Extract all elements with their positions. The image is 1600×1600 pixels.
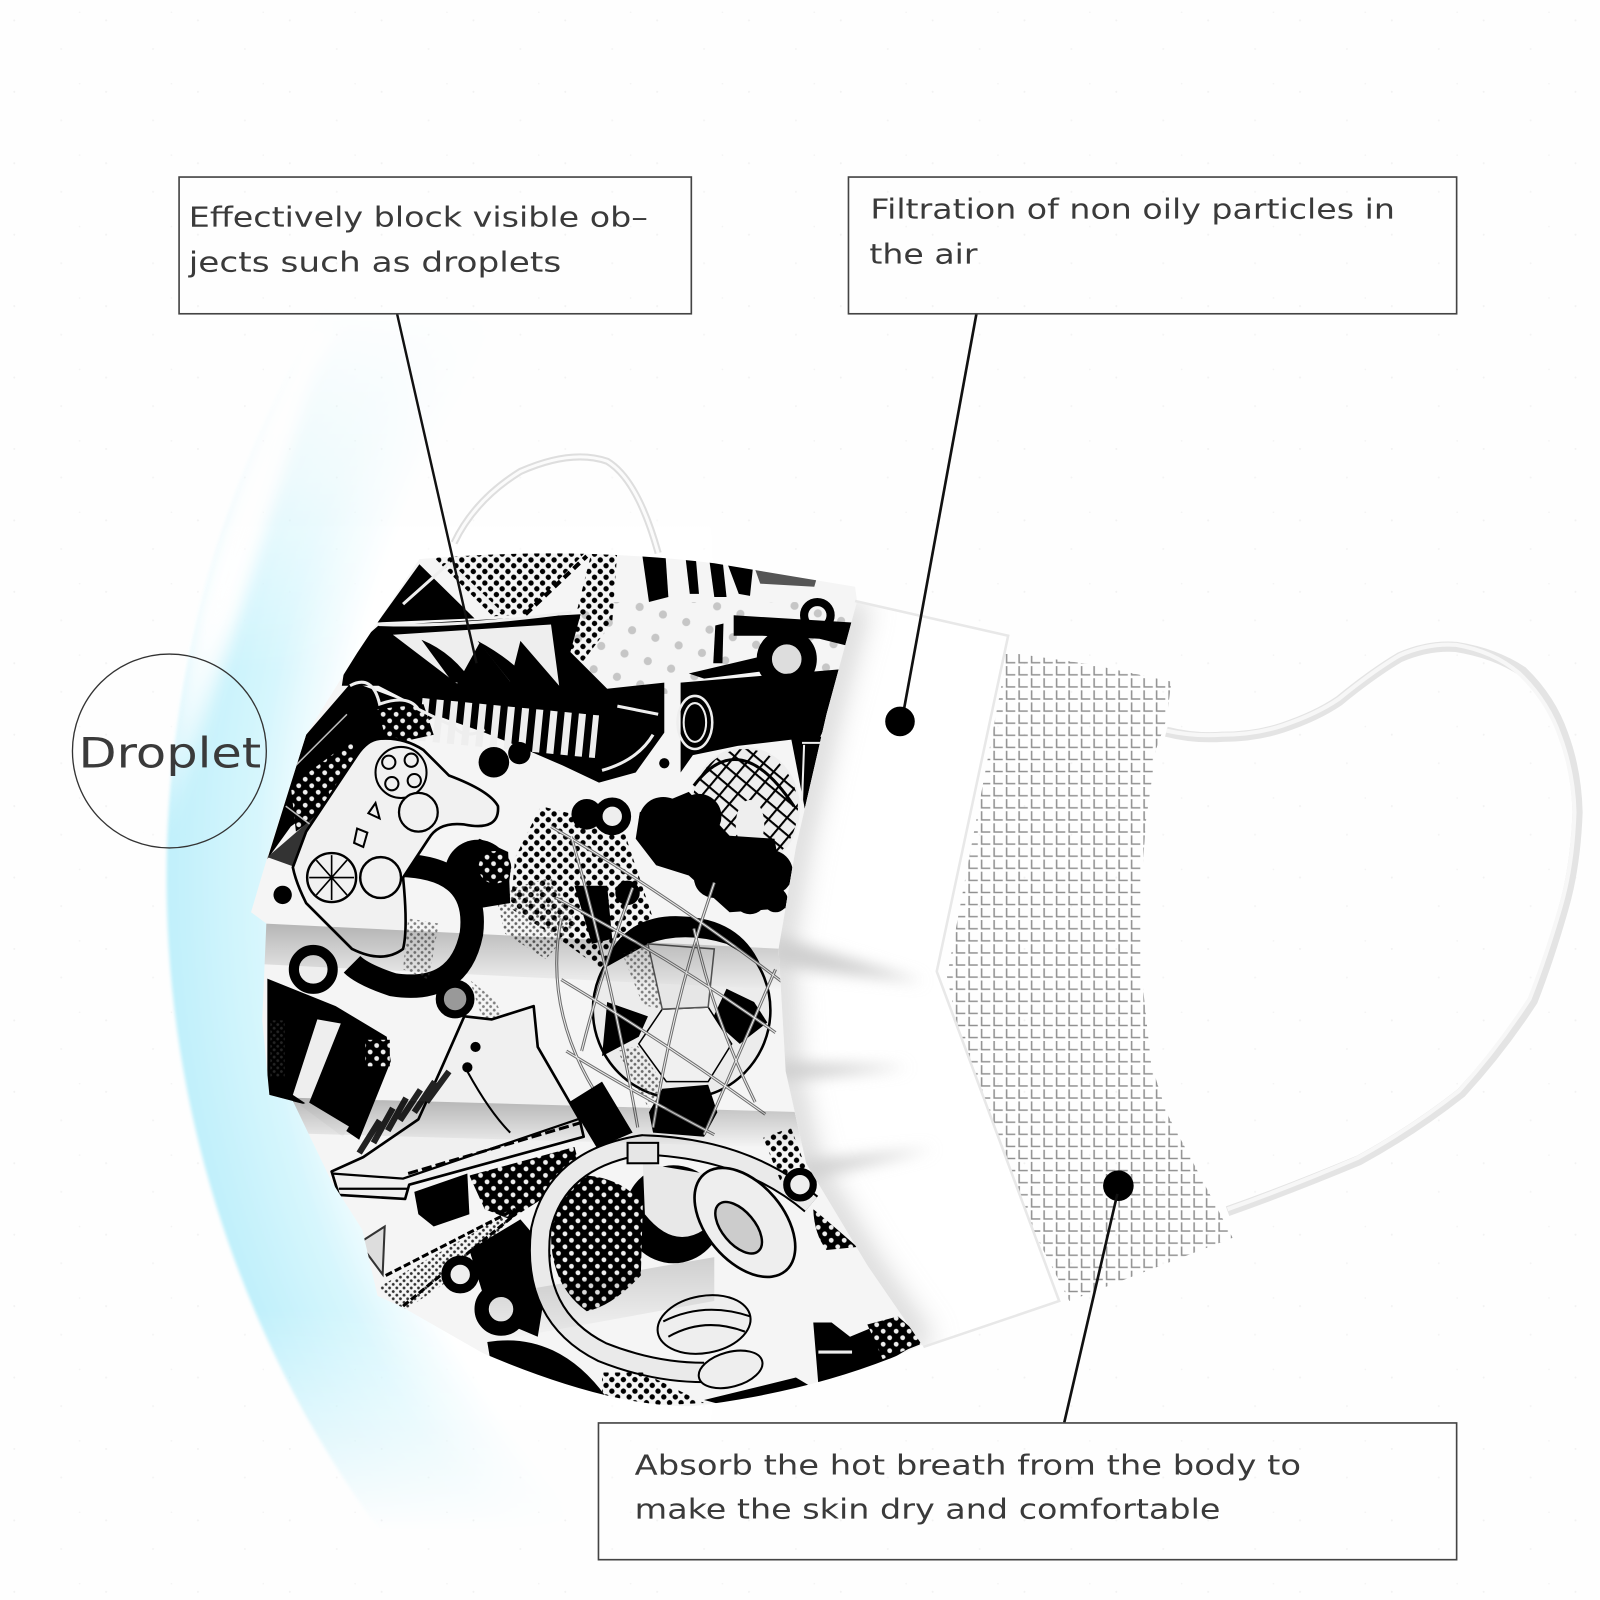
small ring center (440, 984, 470, 1014)
phone-shaped black block (267, 979, 391, 1140)
callout: block droplets: Effectively block visible ob– (189, 202, 648, 234)
callout: filtration: Filtration of non oily particles in (870, 193, 1395, 225)
cleat stripes (420, 719, 597, 737)
racket net (692, 749, 798, 852)
right ear loop (1166, 645, 1578, 1211)
ring left (294, 950, 333, 989)
cleat white zigzag (379, 612, 571, 686)
droplet label circle (72, 654, 266, 848)
black blob under sneaker (414, 1173, 469, 1227)
bottom right cleat (813, 1316, 927, 1385)
fold shadows (263, 923, 806, 1342)
goal net (551, 827, 786, 1135)
black triangle top left (378, 563, 500, 622)
cleat wavy sole (350, 682, 485, 734)
black ink blob (615, 792, 793, 914)
ring near blob (598, 802, 627, 831)
camera lens ring (678, 696, 712, 749)
dashed halftone column (526, 551, 617, 663)
white inner panel (770, 601, 1059, 1347)
game controller (293, 739, 498, 957)
callout: absorb hot breath: make the skin dry and comfortable (635, 1493, 1220, 1525)
callout: filtration (848, 177, 1457, 314)
callout: filtration: the air (869, 238, 978, 270)
cleat heel detail (602, 706, 658, 770)
dotted blob right (813, 1209, 857, 1250)
light dot texture (571, 602, 857, 694)
top ear loop (454, 457, 658, 553)
camera body (681, 668, 852, 772)
sneaker toe black (569, 1082, 633, 1148)
printed mask front (235, 541, 949, 1418)
black splat with dots (445, 839, 511, 908)
halftone under sole (378, 704, 434, 745)
callout: block droplets (179, 177, 691, 314)
top black bars (642, 552, 816, 602)
droplet label circle: Droplet (79, 728, 261, 777)
droplet blue crescent (165, 387, 474, 1501)
dotted black halftone (551, 1176, 643, 1311)
halftone right (763, 1128, 808, 1182)
black triangle right (791, 736, 822, 809)
inner mesh layer (947, 652, 1233, 1301)
black bottom band (704, 1378, 816, 1408)
headphone slider (628, 1143, 658, 1163)
rings lower left (446, 1260, 520, 1329)
halftone under sneaker (469, 1147, 582, 1219)
callout: absorb hot breath (598, 1423, 1457, 1560)
black shape lower left (469, 1219, 551, 1337)
callout leader lines and dots (397, 313, 1134, 1422)
small black dots (273, 742, 669, 904)
ring right (787, 1171, 813, 1198)
soccer cleat body (342, 614, 664, 783)
halftone wedge (378, 1209, 515, 1311)
disc center (643, 1163, 704, 1237)
headphone band (540, 1145, 811, 1372)
camera top block (689, 602, 852, 682)
dots bottom (602, 1372, 704, 1408)
halftone triangle top (428, 551, 587, 616)
lower ear cup (653, 1288, 767, 1395)
black C ring (352, 865, 472, 986)
callout: block droplets: jects such as droplets (188, 246, 561, 278)
callout: absorb hot breath: Absorb the hot breath from the body to (635, 1449, 1301, 1481)
left edge dark print (267, 682, 439, 867)
black arc bottom (490, 1356, 594, 1406)
center halftones (498, 807, 652, 967)
upper ear cup (675, 1149, 815, 1296)
triangle outline (359, 1227, 385, 1274)
soccer ball (593, 916, 770, 1137)
sneaker (332, 1006, 584, 1199)
black disc behind headphones (624, 1165, 722, 1263)
grey halftone (403, 918, 439, 980)
grey halftone near sneaker (471, 981, 501, 1018)
